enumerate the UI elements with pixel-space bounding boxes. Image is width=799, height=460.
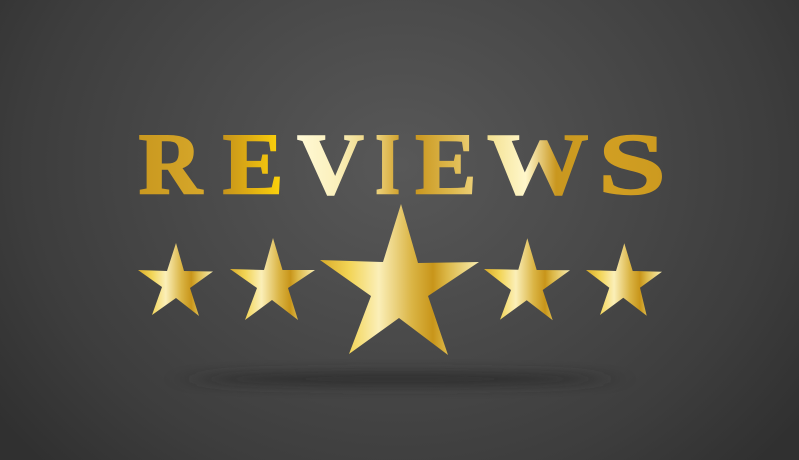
floor shadow	[195, 372, 605, 386]
title: REVIEWS: S	[598, 116, 666, 213]
title: REVIEWS: V	[297, 115, 364, 213]
star 5	[586, 243, 662, 316]
title: REVIEWS: E	[415, 115, 477, 213]
title: REVIEWS: I	[375, 115, 400, 213]
title: REVIEWS: W	[487, 115, 589, 213]
star 3: large centre	[320, 204, 479, 355]
title: REVIEWS: E	[222, 116, 284, 213]
star 1	[138, 243, 213, 316]
star 4	[484, 238, 570, 320]
title: REVIEWS	[138, 115, 666, 214]
title: REVIEWS: R	[138, 116, 204, 214]
star 2	[230, 238, 315, 320]
rating stars	[138, 204, 662, 355]
